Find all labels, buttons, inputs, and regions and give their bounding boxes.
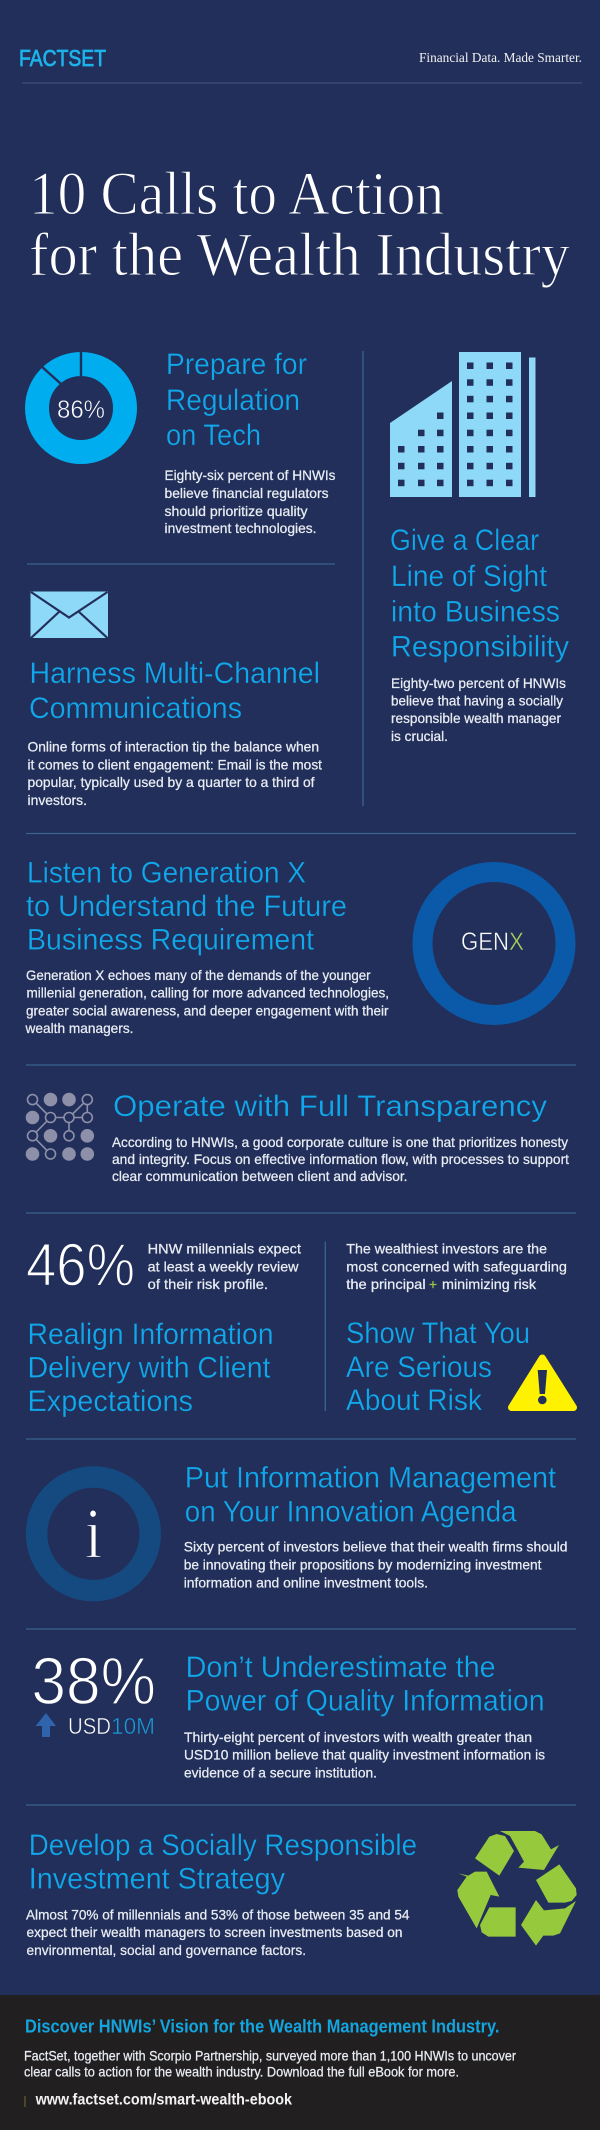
icon: buildings (390, 352, 536, 497)
body text: believe financial regulators (164, 485, 328, 501)
stat: 38%: 38% (31, 1644, 156, 1719)
panel: serious about risk (346, 1240, 574, 1417)
body text: responsible wealth manager (391, 710, 561, 726)
body text: evidence of a secure institution. (184, 1764, 377, 1780)
panel: socially responsible investment (26, 1829, 577, 1958)
heading: Investment Strategy (29, 1862, 285, 1895)
icon: info ring (37, 1477, 150, 1591)
title: 10 Calls to Action (29, 161, 444, 228)
panel: prepare for regulation (37, 348, 336, 536)
heading: Expectations (28, 1385, 193, 1418)
body text: Eighty-two percent of HNWIs (391, 675, 566, 691)
body text (346, 1240, 567, 1292)
heading (29, 657, 320, 725)
body text: clear communication between client and advisor. (112, 1168, 408, 1184)
body text: believe that having a socially (391, 693, 563, 709)
body text: wealth managers. (25, 1020, 133, 1036)
panel: realign information delivery (26, 1232, 301, 1418)
tagline: Financial Data. Made Smarter. (419, 51, 582, 66)
heading: Line of Sight (391, 560, 547, 593)
body text: Generation X echoes many of the demands of the younger (26, 967, 371, 983)
body text: Eighty-six percent of HNWIs (164, 467, 336, 483)
footer text: clear calls to action for the wealth industry. Download the full eBook for more. (24, 2064, 459, 2080)
heading: Give a Clear (390, 524, 539, 557)
heading: Operate with Full Transparency (113, 1090, 547, 1123)
body text: investors. (28, 792, 87, 808)
heading: Are Serious (346, 1351, 492, 1384)
heading: Delivery with Client (28, 1352, 270, 1384)
body text (164, 467, 336, 536)
heading: Don’t Underestimate the (186, 1651, 496, 1684)
heading (166, 348, 307, 452)
body text: most concerned with safeguarding (346, 1258, 567, 1274)
heading (28, 1318, 274, 1418)
body text: it comes to client engagement: Email is the most (28, 756, 322, 772)
header (19, 45, 582, 71)
heading: Prepare for (166, 348, 307, 381)
heading: Listen to Generation X (27, 857, 306, 890)
body text: millenial generation, calling for more advanced technologies, (26, 985, 389, 1001)
heading (29, 1829, 417, 1895)
panel: full transparency (26, 1090, 569, 1184)
body text: The wealthiest investors are the (346, 1240, 547, 1256)
donut chart: 86%: 86% (57, 396, 105, 424)
body text: minimizing risk (442, 1276, 537, 1292)
heading (185, 1462, 556, 1528)
heading: Communications (29, 692, 242, 725)
panel: multi-channel communications (28, 592, 322, 808)
title: for the Wealth Industry (29, 222, 570, 289)
icon: info ring: i (84, 1494, 102, 1574)
panel: information management (37, 1462, 568, 1591)
panel: footer (0, 1995, 600, 2130)
body text: environmental, social and governance factors. (26, 1942, 306, 1958)
heading: Regulation (166, 384, 300, 417)
heading: Power of Quality Information (186, 1684, 545, 1718)
label: USD10M: 10M (111, 1713, 155, 1739)
body text (184, 1539, 567, 1590)
heading: Realign Information (28, 1318, 274, 1351)
icon: network (26, 1094, 93, 1160)
logo: FactSet: FACTSET (19, 45, 106, 71)
footer text (24, 2047, 516, 2080)
body text: According to HNWIs, a good corporate culture is one that prioritizes honesty (112, 1134, 568, 1150)
heading: Business Requirement (27, 923, 314, 956)
icon: GenX ring: GEN (461, 928, 509, 956)
body text: and integrity. Focus on effective information flow, with processes to support (112, 1151, 569, 1167)
body text: greater social awareness, and deeper engagement with their (26, 1002, 389, 1018)
heading (390, 524, 569, 664)
body text: + (429, 1276, 437, 1292)
icon: up arrow (36, 1713, 56, 1737)
body text: the principal (346, 1276, 426, 1292)
body text: be innovating their propositions by modernizing investment (184, 1557, 542, 1573)
heading: Develop a Socially Responsible (29, 1829, 417, 1862)
heading (26, 857, 347, 956)
heading: Put Information Management (185, 1462, 556, 1495)
heading (186, 1651, 545, 1718)
donut chart: 86% (37, 351, 125, 452)
panel: generation X (25, 857, 565, 1036)
body text (112, 1134, 569, 1184)
heading: Show That You (346, 1317, 530, 1350)
icon: envelope (30, 592, 108, 638)
body text: information and online investment tools. (184, 1574, 428, 1590)
body text: Thirty-eight percent of investors with wealth greater than (184, 1729, 532, 1745)
body text (26, 1906, 410, 1958)
icon: GenX ring: X (509, 928, 524, 956)
body text: investment technologies. (164, 520, 316, 536)
body text: should prioritize quality (164, 503, 308, 519)
body text (28, 739, 322, 808)
body text: Online forms of interaction tip the balance when (28, 739, 319, 755)
stat description: of their risk profile. (148, 1276, 268, 1292)
icon: warning triangle (512, 1358, 574, 1408)
body text (391, 675, 566, 744)
body text: Almost 70% of millennials and 53% of those between 35 and 54 (26, 1906, 410, 1922)
body text (184, 1729, 545, 1780)
heading: on Tech (166, 419, 261, 452)
panel: quality information (31, 1644, 545, 1780)
body text (25, 967, 389, 1036)
label: USD10M: USD (68, 1713, 111, 1739)
stat description: HNW millennials expect (148, 1240, 301, 1256)
stat description: at least a weekly review (148, 1258, 299, 1274)
footer heading: Discover HNWIs’ Vision for the Wealth Management Industry. (25, 2017, 499, 2037)
link: www.factset.com/smart-wealth-ebook (35, 2091, 292, 2108)
body text: popular, typically used by a quarter to a third of (28, 774, 315, 790)
icon: GenX ring (422, 872, 566, 1015)
icon: recycle (457, 1831, 577, 1946)
stat description (148, 1240, 301, 1292)
stat: 46%: 46% (26, 1232, 135, 1298)
heading (346, 1317, 530, 1417)
label: USD10M (68, 1713, 155, 1739)
body text: USD10 million believe that quality investment information is (184, 1747, 545, 1763)
heading: Harness Multi-Channel (30, 657, 320, 690)
panel: business responsibility (390, 352, 569, 744)
body text: Sixty percent of investors believe that their wealth firms should (184, 1539, 567, 1555)
footer text: FactSet, together with Scorpio Partnership, surveyed more than 1,100 HNWIs to uncover (24, 2047, 516, 2063)
heading: About Risk (346, 1384, 482, 1417)
heading: on Your Innovation Agenda (185, 1495, 517, 1528)
body text: is crucial. (391, 728, 448, 744)
heading: Responsibility (391, 630, 569, 664)
body text: expect their wealth managers to screen investments based on (26, 1924, 402, 1940)
heading: to Understand the Future (26, 890, 347, 923)
title (29, 161, 570, 289)
heading: into Business (391, 596, 560, 628)
